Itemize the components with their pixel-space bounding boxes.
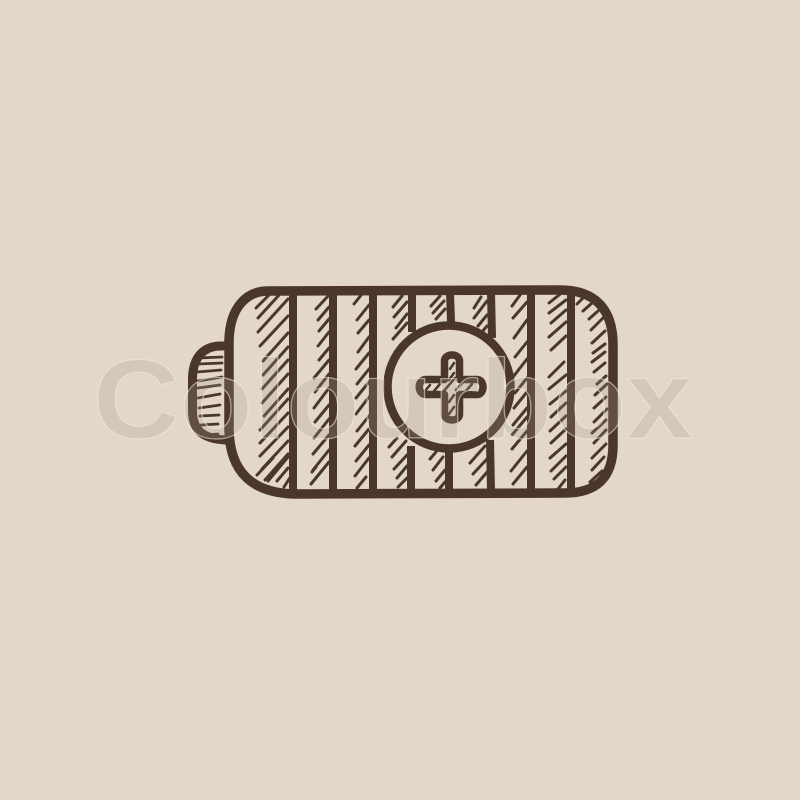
circle badge with plus symbol [388,326,510,448]
diagonal hatching [256,291,607,489]
watermark: Colourbox [93,337,693,462]
battery casing outline [229,290,613,494]
icon: battery [192,290,613,494]
vertical stripes [293,293,571,491]
plus symbol [419,355,483,420]
battery terminal nub [192,346,226,440]
